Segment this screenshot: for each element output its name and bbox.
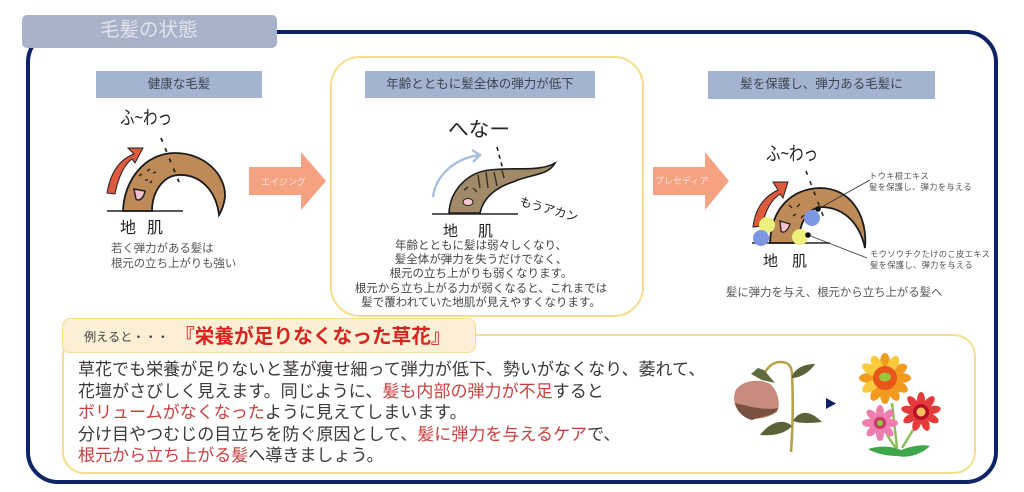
icon: protected hair illustration: 髪を保護し、弾力を与える bbox=[869, 182, 972, 192]
icon: weakened hair illustration: へなー bbox=[448, 119, 510, 141]
heading: protected hair: 髪を保護し、弾力ある毛髪に bbox=[740, 77, 903, 91]
icon: weakened hair illustration: もうアカン bbox=[518, 194, 580, 224]
description: 根元から立ち上がる力が弱くなると、これまでは bbox=[355, 283, 607, 295]
icon: blooming flowers bbox=[859, 353, 941, 457]
body text: 分け目やつむじの目立ちを防ぐ原因として、髪に弾力を与えるケアで、 bbox=[78, 425, 620, 444]
description: 年齢とともに髪は弱々しくなり、 bbox=[395, 240, 567, 252]
body text: ボリュームがなくなったように見えてしまいます。 bbox=[78, 403, 467, 422]
panel: healthy hair bbox=[96, 71, 262, 270]
heading: aging hair bbox=[365, 71, 595, 98]
tab: analogy heading bbox=[62, 318, 476, 353]
panel: aging hair bbox=[330, 56, 644, 317]
body text: 草花でも栄養が足りないと茎が痩せ細って弾力が低下、勢いがなくなり、萎れて、 bbox=[78, 360, 705, 379]
icon: wilted flower bbox=[734, 360, 822, 452]
description: 髪全体が弾力を失うだけでなく、 bbox=[395, 254, 567, 266]
icon: healthy hair illustration: 地肌 bbox=[120, 219, 174, 237]
arrow: preservation bbox=[653, 152, 729, 210]
heading: healthy hair: 健康な毛髪 bbox=[148, 77, 210, 91]
body text bbox=[78, 360, 705, 465]
description: 根元の立ち上がりも強い bbox=[111, 258, 236, 270]
title tab bbox=[22, 15, 277, 48]
lead-in text: 例えると・・・ bbox=[84, 330, 169, 344]
panel: protected hair bbox=[708, 71, 990, 299]
icon: protected hair illustration: 髪を保護し、弾力を与える bbox=[870, 260, 973, 270]
icon: healthy hair illustration bbox=[106, 108, 226, 237]
body text: 根元から立ち上がる髪へ導きましょう。 bbox=[78, 446, 384, 465]
description: 若く弾力がある髪は bbox=[111, 243, 214, 255]
heading: protected hair bbox=[708, 71, 935, 99]
heading text: 『栄養が足りなくなった草花』 bbox=[175, 326, 451, 348]
icon: protected hair illustration: トウキ根エキス bbox=[869, 171, 929, 181]
description: 髪で覆われていた地肌が見えやすくなります。 bbox=[361, 297, 601, 309]
description bbox=[111, 242, 236, 270]
arrow: preservation: プレセディア bbox=[655, 175, 708, 186]
arrow: aging bbox=[249, 152, 326, 210]
heading: aging hair: 年齢とともに髪全体の弾力が低下 bbox=[386, 77, 574, 91]
panel: analogy bbox=[62, 334, 976, 474]
description: 髪に弾力を与え、根元から立ち上がる髪へ bbox=[726, 287, 942, 299]
icon: protected hair illustration: モウソウチクたけのこ皮エキス bbox=[870, 249, 990, 259]
heading: healthy hair bbox=[96, 71, 262, 98]
description bbox=[355, 239, 607, 309]
icon: healthy hair illustration: ふ~わっ bbox=[120, 108, 172, 129]
arrow: aging: エイジング bbox=[261, 176, 306, 187]
icon: protected hair illustration: ふ~わっ bbox=[766, 144, 818, 165]
body text: 花壇がさびしく見えます。同じように、髪も内部の弾力が不足すると bbox=[78, 382, 604, 401]
icon: protected hair illustration: 地肌 bbox=[763, 253, 821, 270]
icon: protected hair illustration bbox=[752, 144, 990, 270]
icon: weakened hair illustration bbox=[432, 119, 580, 238]
description: 根元の立ち上がりも弱くなります。 bbox=[390, 268, 572, 280]
icon: triangle arrow bbox=[826, 398, 836, 409]
title tab: 毛髪の状態 bbox=[100, 19, 198, 41]
